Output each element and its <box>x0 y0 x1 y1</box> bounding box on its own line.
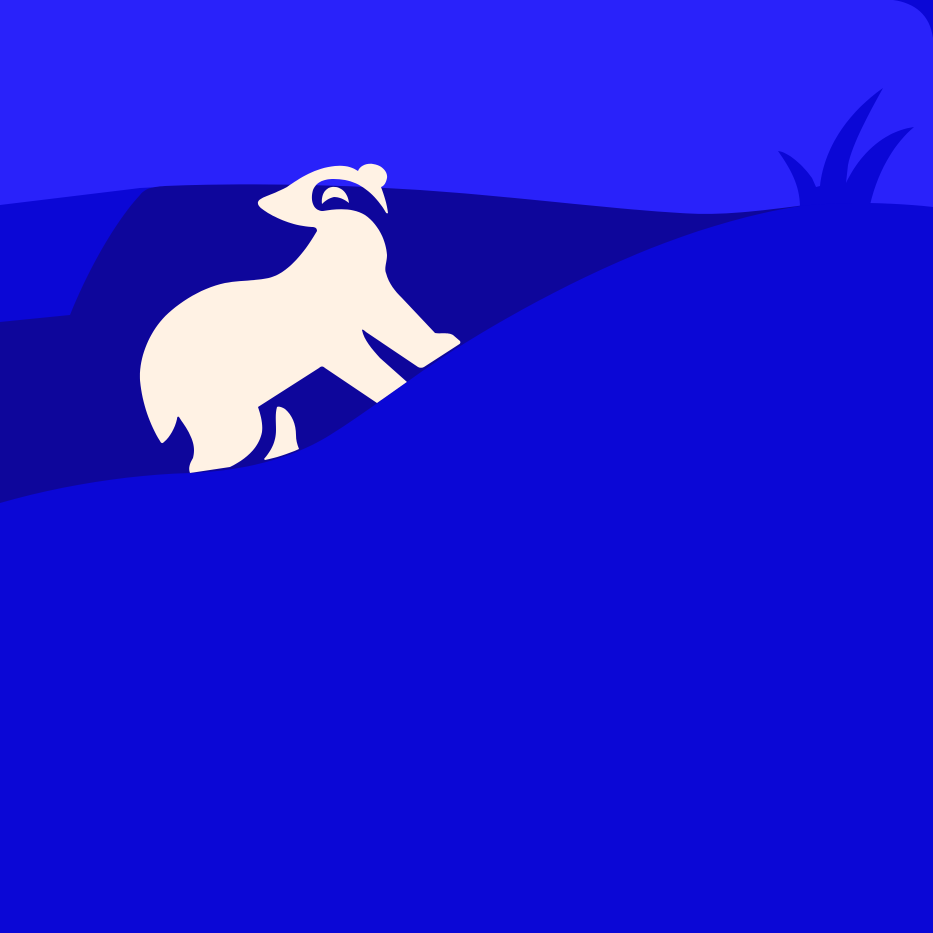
top right corner shape <box>893 0 933 38</box>
dark back hill <box>0 184 805 520</box>
badger body and head <box>140 164 460 473</box>
badger <box>140 164 460 473</box>
badger eye <box>322 187 349 204</box>
far left hill <box>0 187 160 330</box>
grass tuft <box>778 88 914 207</box>
badger far hind leg <box>264 407 299 460</box>
front hill <box>0 203 933 933</box>
